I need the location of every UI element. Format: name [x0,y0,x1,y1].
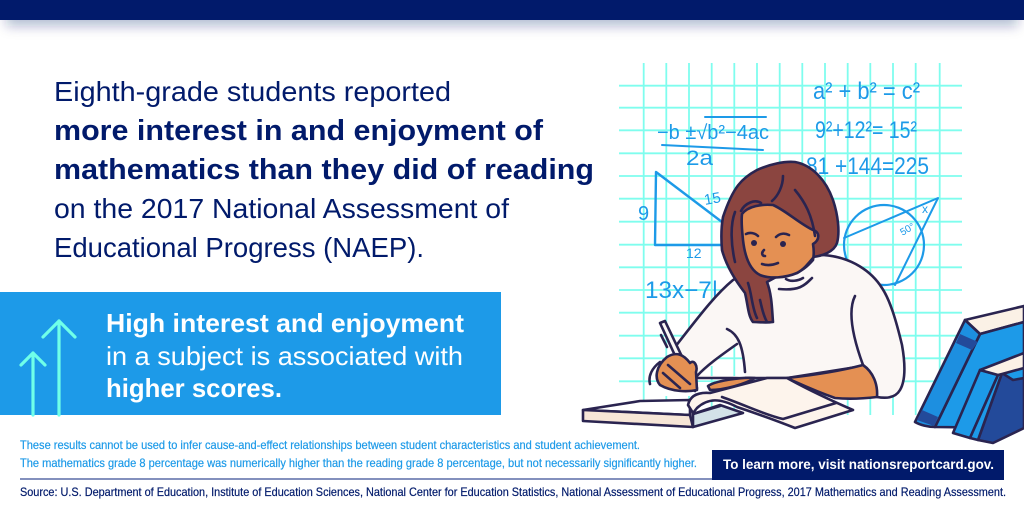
illustration: open notebook [583,378,853,428]
handwritten math: 81 +144=225 [806,153,929,180]
headline text [54,76,594,263]
handwritten math: −b ±√b²−4ac [657,122,769,144]
footnotes [20,438,697,470]
face details [746,233,789,265]
headline text: more interest in and enjoyment of [54,115,543,147]
book: large blue [965,306,1024,334]
callout text: in a subject is associated with [106,341,463,371]
handwritten math: 9²+12²= 15² [815,117,917,144]
book: blue small [953,370,998,438]
button: learn more: To learn more, visit nationsreportcard.gov. [723,457,994,472]
panel: callout [0,292,501,415]
headline text: on the 2017 National Assessment of [54,193,509,224]
footnotes: These results cannot be used to infer cause-and-effect relationships between student characteristics and student achievement. [20,438,640,452]
notebook underside [693,405,743,427]
callout text [106,308,464,403]
handwritten math: x [922,202,928,216]
footnotes: The mathematics grade 8 percentage was numerically higher than the reading grade 8 percentage, but not necessarily significantly higher. [20,456,697,470]
headline text: mathematics than they did of reading [54,154,594,186]
writing hand [657,354,697,391]
sweater folds [697,278,863,376]
illustration: stack of books [915,306,1024,443]
callout text: higher scores. [106,373,282,403]
top bar [0,0,1024,26]
hair strands [732,176,815,322]
neck [797,258,813,273]
headline text: Eighth-grade students reported [54,76,451,107]
book pages [980,353,1024,375]
other hand fingers [708,378,755,390]
handwritten math: 50° [898,221,917,238]
handwritten math: 15 [703,189,722,209]
forearm [787,365,877,399]
handwritten math: a² + b² = c² [813,78,920,105]
illustration: graph paper grid [619,63,962,415]
handwritten math: 12 [686,245,702,261]
icon: up arrows [21,321,75,415]
back hair [721,162,838,322]
button: learn more [712,450,1004,480]
book: navy [978,373,1024,443]
notebook top surface [583,400,690,415]
divider rule [20,478,712,480]
notebook right page [688,378,853,428]
callout text: High interest and enjoyment [106,308,464,338]
pen [660,321,697,391]
headline text: Educational Progress (NAEP). [54,232,424,263]
white knockout around hand [650,382,710,396]
gap between arm and body [700,345,745,377]
handwritten math: 9 [638,203,649,225]
handwritten math: 2a [686,147,713,170]
handwritten math [638,78,938,304]
illustration: student [649,162,904,399]
sweater [675,255,904,398]
handwritten math: 13x−7| [645,277,718,304]
face [742,205,818,277]
notebook left block [583,410,693,427]
